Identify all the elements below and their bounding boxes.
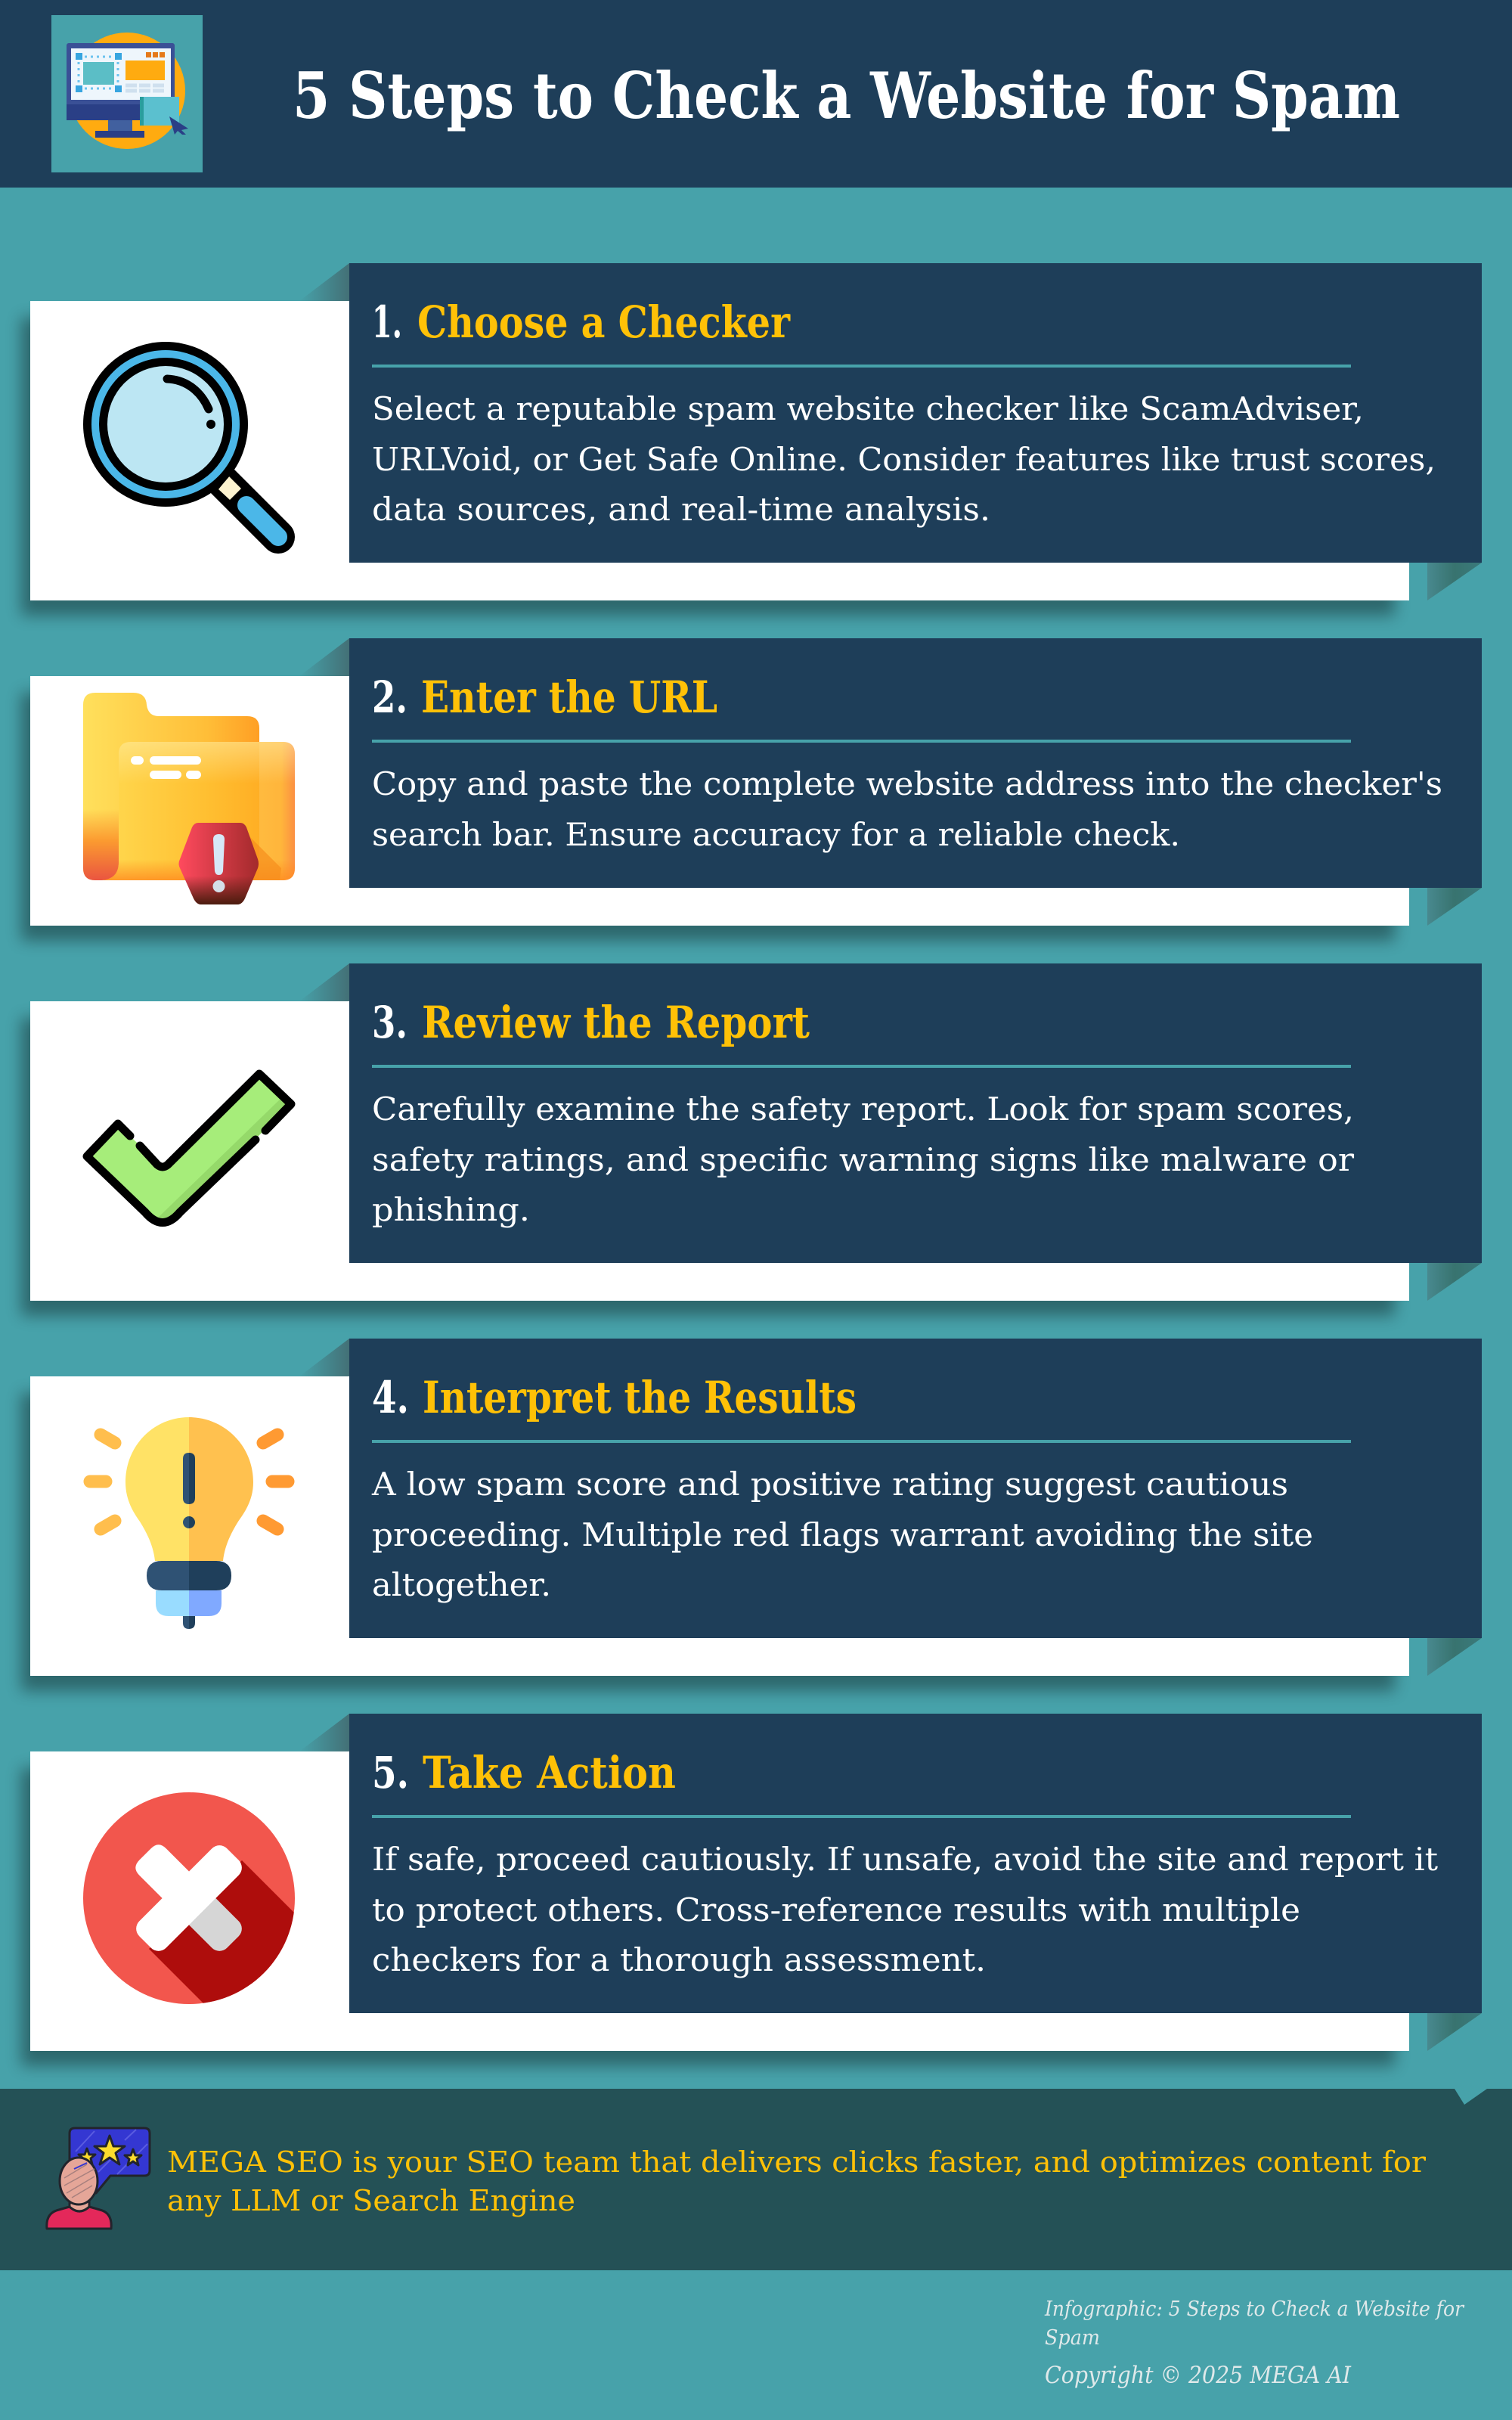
text: step 2 description: Copy and paste the complete website address into the checker's [372, 765, 1442, 802]
icon: light bulb [90, 1417, 288, 1629]
panel: step 1 [21, 263, 1482, 616]
heading: step 1: 1. [372, 296, 402, 348]
text: step 4 description: A low spam score and positive rating suggest cautious [371, 1466, 1288, 1503]
text: step 1 description: URLVoid, or Get Safe Online. Consider features like trust scores, [372, 441, 1436, 478]
text: step 2 description [372, 765, 1442, 853]
text: footer credits: Infographic: 5 Steps to Check a Website for [1044, 2297, 1465, 2321]
text: footer credits: Copyright © 2025 MEGA AI [1045, 2362, 1352, 2389]
text: promo message: MEGA SEO is your SEO team that delivers clicks faster, and optimizes content for [167, 2145, 1427, 2179]
text: step 1 description: Select a reputable spam website checker like ScamAdviser, [372, 390, 1364, 427]
text: step 4 description: proceeding. Multiple red flags warrant avoiding the site [372, 1516, 1313, 1553]
icon: magnifying glass [83, 342, 278, 537]
heading: step 4: Interpret the Results [423, 1372, 857, 1423]
panel: step 3 [21, 963, 1482, 1316]
text: step 3 description: Carefully examine the safety report. Look for spam scores, [372, 1091, 1354, 1128]
text: footer credits [1044, 2297, 1465, 2389]
icon: check mark [87, 1074, 291, 1222]
heading: step 2: 2. [372, 672, 407, 723]
heading: step 3: 3. [372, 997, 407, 1048]
header bar [0, 0, 1512, 188]
text: promo message: any LLM or Search Engine [167, 2184, 575, 2217]
heading: step 5: 5. [372, 1747, 409, 1798]
text: footer credits: Spam [1045, 2326, 1100, 2350]
panel: step 4 [21, 1339, 1482, 1691]
text: step 2 description: search bar. Ensure accuracy for a reliable check. [372, 816, 1180, 853]
text: promo message [167, 2145, 1427, 2217]
text: step 3 description: phishing. [372, 1191, 530, 1228]
panel: step 5 [21, 1714, 1482, 2066]
icon: red cross circle [83, 1792, 295, 2004]
text: step 3 description: safety ratings, and specific warning signs like malware or [372, 1141, 1355, 1178]
heading: step 4: 4. [372, 1372, 409, 1423]
icon: folder with warning [83, 693, 295, 904]
panel: promo band [0, 2089, 1512, 2270]
text: step 1 description [372, 390, 1436, 528]
text: step 1 description: data sources, and real-time analysis. [372, 491, 990, 528]
text: step 5 description: to protect others. Cross-reference results with multiple [372, 1891, 1300, 1928]
text: step 3 description [372, 1091, 1355, 1228]
heading: step 5: Take Action [423, 1747, 676, 1798]
icon: person with rating bubble [47, 2128, 150, 2229]
text: step 5 description [372, 1841, 1438, 1978]
text: step 4 description: altogether. [372, 1566, 551, 1603]
panel: step 2 [21, 638, 1482, 941]
text: step 5 description: If safe, proceed cautiously. If unsafe, avoid the site and report it [372, 1841, 1438, 1878]
text: step 5 description: checkers for a thorough assessment. [372, 1941, 986, 1978]
heading: step 1: Choose a Checker [417, 296, 791, 348]
heading: step 3: Review the Report [422, 997, 810, 1048]
icon: website monitor logo [51, 15, 203, 172]
text: step 4 description [371, 1466, 1313, 1603]
heading: step 2: Enter the URL [421, 672, 717, 723]
